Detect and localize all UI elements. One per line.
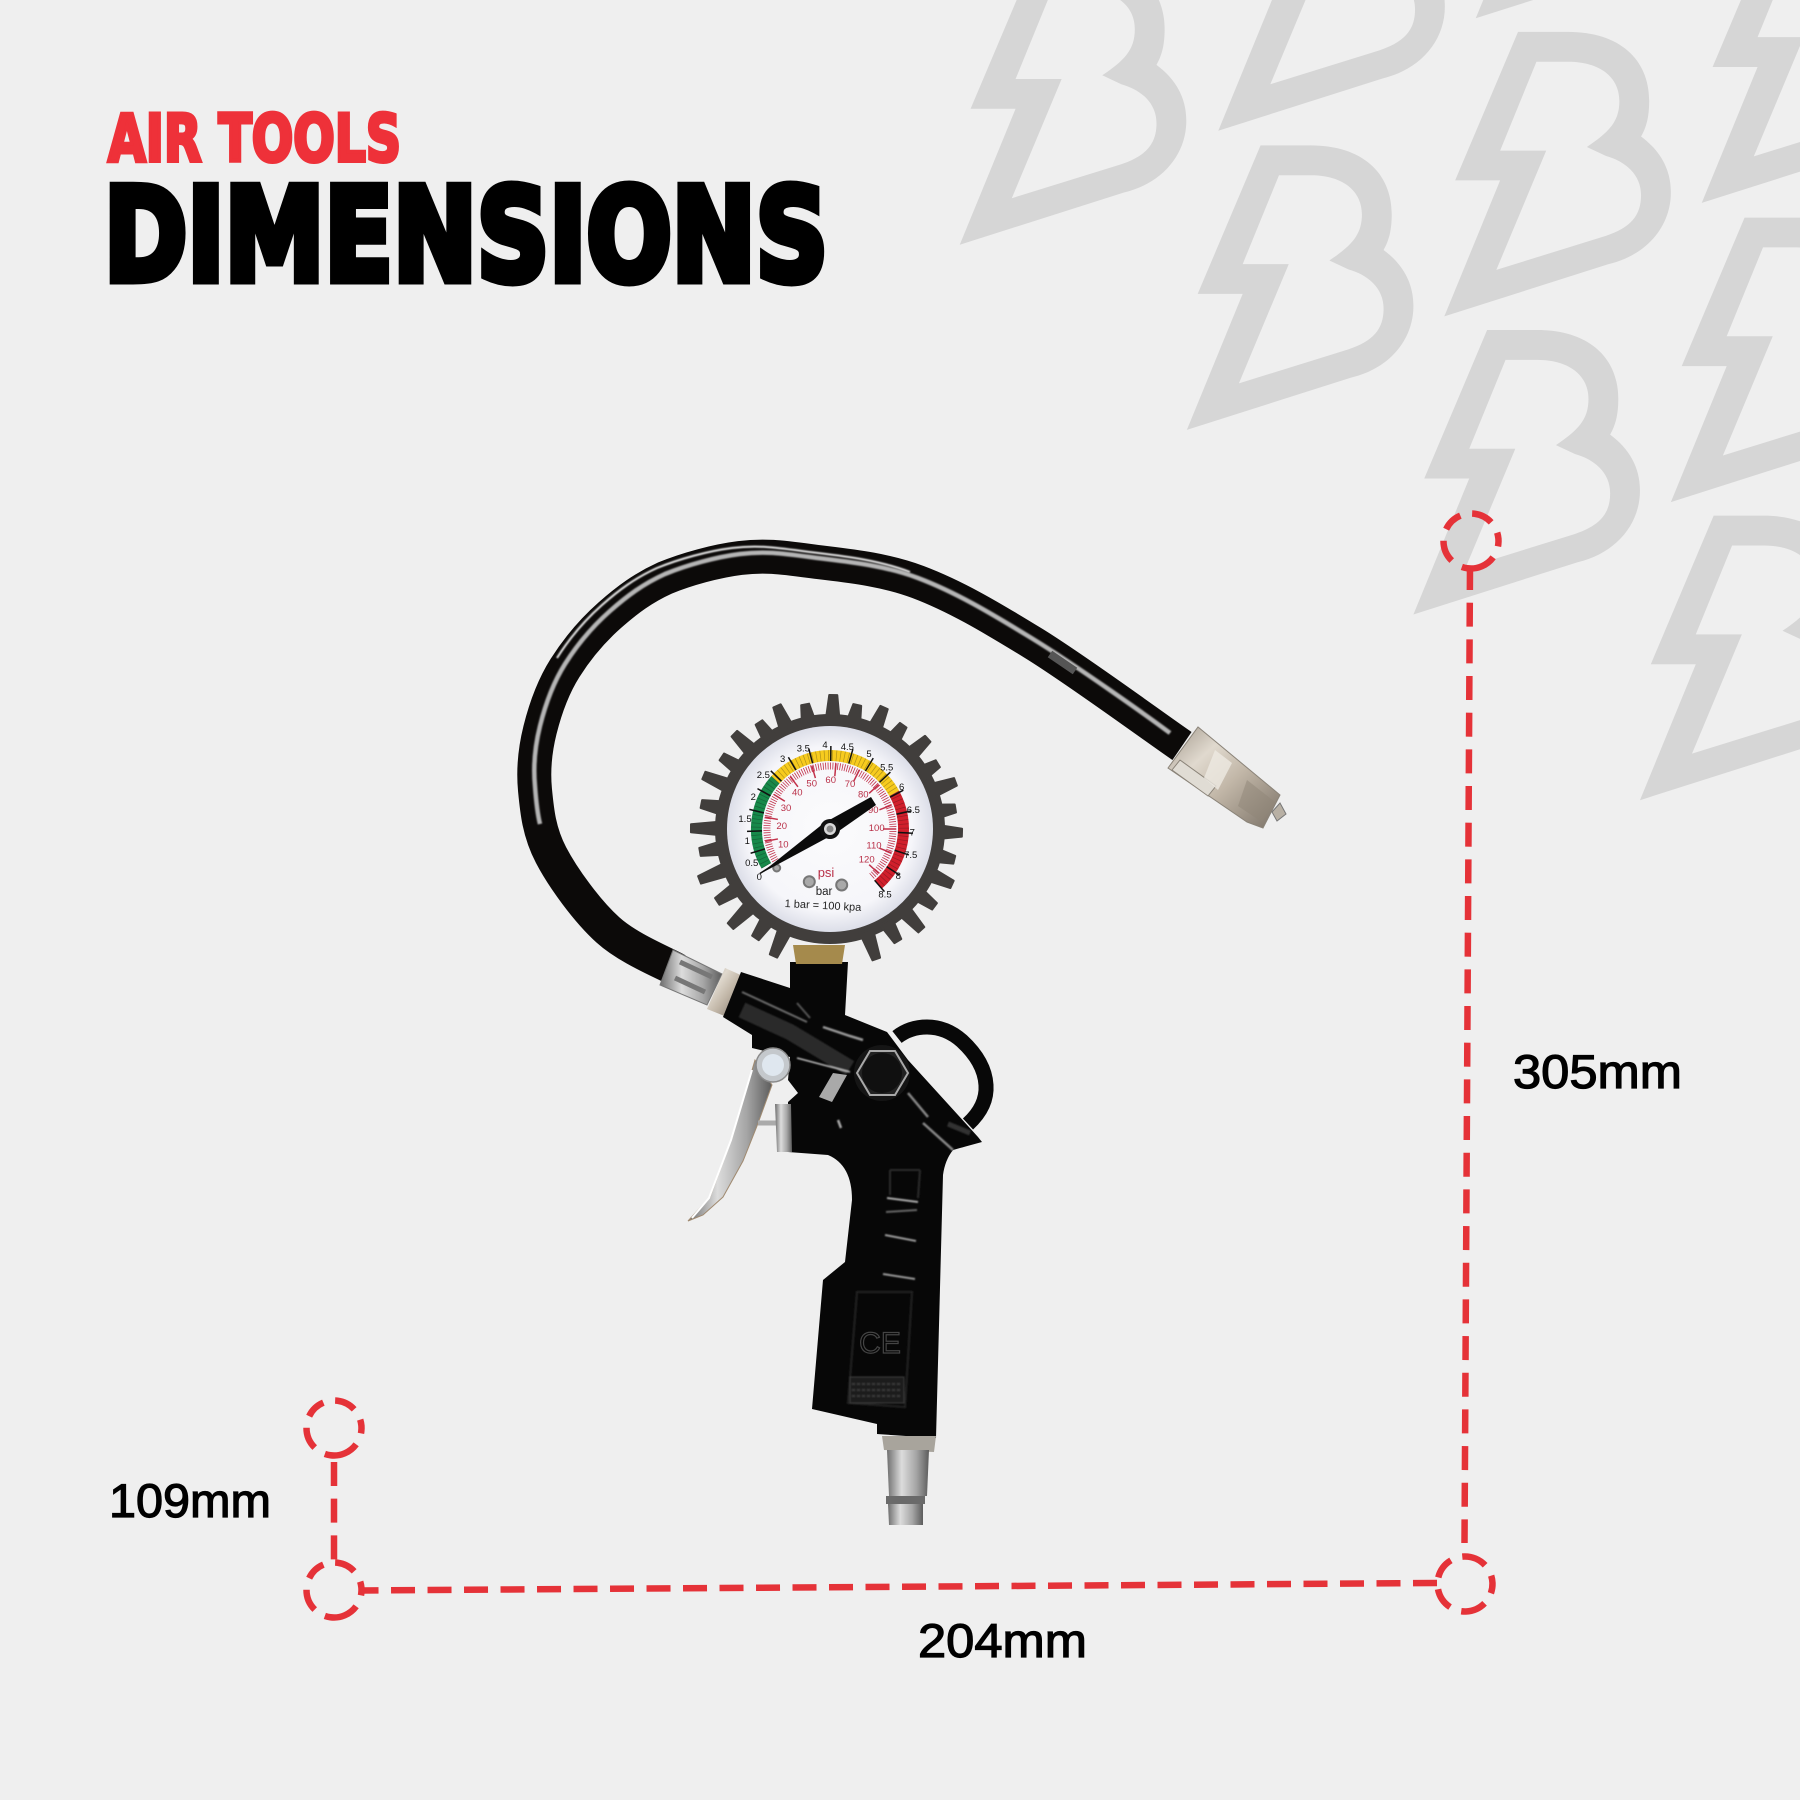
trigger lever: [688, 1048, 847, 1221]
bar scale numbers: 2.5: [757, 770, 770, 781]
bar scale numbers: 5.5: [880, 762, 893, 774]
psi scale numbers: 40: [792, 788, 803, 798]
psi scale numbers: 20: [776, 821, 787, 832]
bar scale numbers: 7.5: [904, 850, 917, 861]
dimension: depth 109mm: [109, 1397, 365, 1560]
bar scale numbers: 0.5: [745, 858, 758, 869]
logo B right middle: [1671, 218, 1800, 502]
bar major ticks: [747, 746, 913, 892]
bottom air coupler: [882, 1436, 936, 1525]
dimension: width 204mm: [363, 1583, 1437, 1668]
bar scale numbers: 6: [899, 782, 904, 793]
psi scale numbers: 60: [825, 775, 836, 786]
psi scale numbers: 50: [806, 778, 817, 790]
bar scale numbers: 2: [751, 792, 756, 803]
height dashed line: [1464, 566, 1470, 1543]
pressure gauge: [691, 695, 962, 961]
depth value: 109mm: [109, 1475, 271, 1528]
logo B top centre: [1218, 0, 1445, 131]
psi scale numbers: [776, 775, 885, 866]
depth marker top circle: [303, 1397, 365, 1459]
logo B lower: [1413, 330, 1640, 615]
width value: 204mm: [918, 1615, 1087, 1668]
logo B right top: [1702, 0, 1800, 203]
psi scale numbers: 80: [858, 790, 869, 800]
colour pressure zones: [756, 756, 904, 884]
hex bolt: [854, 1045, 910, 1101]
hose ferrule: [660, 950, 743, 1017]
CE mark: CE: [859, 1327, 901, 1360]
marker: origin circle: [303, 1559, 365, 1621]
bar scale numbers: 4.5: [841, 742, 854, 753]
logo B upper right: [1444, 32, 1671, 316]
bar scale numbers: 8.5: [878, 890, 892, 900]
height marker top circle: [1440, 510, 1502, 572]
bar scale numbers: 6.5: [907, 805, 920, 816]
dial unit labels: 1 bar = 100 kpa: [784, 898, 862, 914]
dial unit labels: [784, 865, 862, 914]
psi scale ticks: [765, 763, 896, 876]
gauge dial face: [727, 726, 933, 932]
rubber gauge bezel: [691, 695, 962, 961]
height value: 305mm: [1513, 1046, 1682, 1099]
bar scale numbers: 3.5: [797, 744, 810, 754]
title: AIR TOOLS: AIR TOOLS: [108, 102, 401, 177]
psi scale numbers: 70: [845, 779, 855, 790]
dimension: height 305mm: [1440, 510, 1682, 1543]
bar scale numbers: 8: [896, 871, 901, 882]
width dashed line: [363, 1583, 1437, 1590]
gauge needle: [760, 797, 876, 874]
psi scale numbers: 10: [778, 840, 789, 850]
bar scale numbers: 3: [780, 754, 785, 765]
gauge neck: [793, 945, 845, 964]
heading: DIMENSIONS: DIMENSIONS: [104, 162, 828, 311]
bar scale numbers: 4: [822, 740, 828, 751]
logo B top edge: [1476, 0, 1702, 18]
psi scale numbers: 30: [781, 803, 791, 814]
background brand pattern: B lightning logos: [960, 0, 1800, 800]
logo B right bottom: [1640, 516, 1800, 800]
psi scale numbers: 100: [869, 823, 885, 834]
psi scale numbers: 90: [868, 805, 879, 816]
hose central highlight: [534, 553, 1170, 824]
bar scale numbers: 0: [757, 872, 762, 883]
marker: corner circle: [1437, 1556, 1493, 1612]
bar scale numbers: 7: [910, 828, 915, 838]
body highlights and grip ridges: [742, 992, 970, 1407]
bar scale numbers: 5: [866, 749, 872, 760]
dial screws: [773, 864, 847, 890]
hose end chuck: [1168, 727, 1286, 828]
dial unit labels: psi: [818, 865, 834, 880]
bar scale numbers: 1.5: [738, 814, 752, 825]
depth dashed line: [331, 1462, 337, 1560]
gun body: [723, 962, 982, 1438]
dial unit labels: bar: [816, 886, 832, 898]
logo B top left: [960, 0, 1186, 245]
psi scale numbers: 110: [866, 840, 882, 852]
air hose: [534, 547, 1182, 970]
gun handle ring: [897, 1027, 986, 1124]
bar scale numbers: [738, 740, 920, 900]
hose edge highlight: [557, 547, 910, 658]
product: tyre inflator gun with gauge: [534, 547, 1286, 1525]
bar scale numbers: 1: [745, 836, 750, 847]
logo B middle: [1187, 145, 1413, 430]
psi scale numbers: 120: [859, 854, 875, 866]
